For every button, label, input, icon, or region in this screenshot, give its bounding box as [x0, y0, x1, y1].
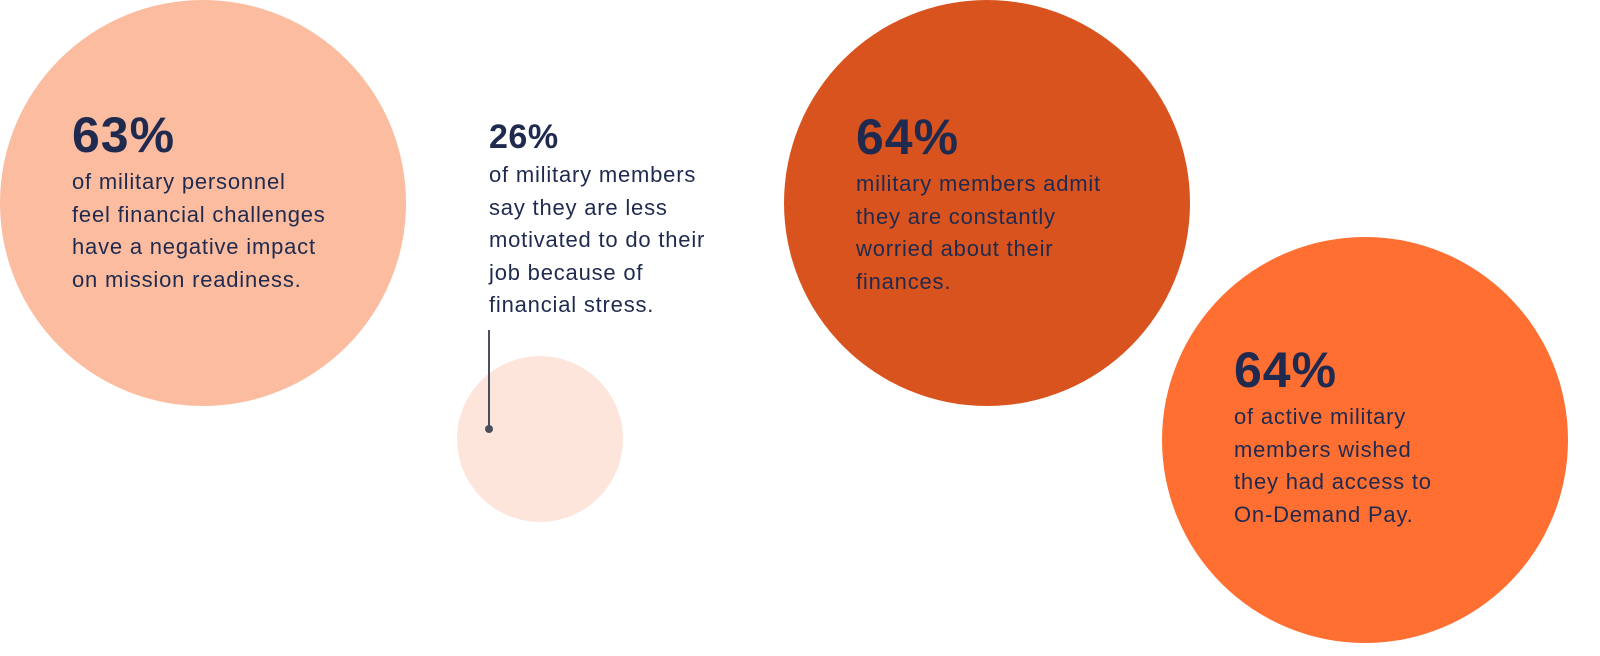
text: 26%: say they are less	[489, 194, 668, 220]
text: 64% worried	[856, 109, 1101, 294]
circle: 64% orange	[1162, 237, 1568, 643]
text: 64% on-demand: On-Demand Pay.	[1234, 502, 1414, 526]
text: 64% worried: 64%	[856, 109, 959, 165]
text: 63%: of military personnel	[72, 169, 286, 194]
text: 64% on-demand: of active military	[1234, 404, 1406, 429]
text: 63%: 63%	[72, 107, 175, 163]
circle: small 26%	[457, 356, 623, 522]
circle: 63%	[0, 0, 406, 406]
text: 64% worried: they are constantly	[856, 204, 1056, 228]
text: 26%: motivated to do their	[489, 227, 705, 252]
text: 64% worried: worried about their	[856, 236, 1053, 261]
text: 63%: on mission readiness.	[72, 266, 302, 292]
text: 64% on-demand	[1234, 342, 1432, 526]
text: 26%: job because of	[489, 260, 643, 284]
text: 63%	[72, 107, 326, 292]
text: 64% on-demand: they had access to	[1234, 469, 1432, 494]
text: 64% on-demand: members wished	[1234, 436, 1411, 462]
text: 63%: feel financial challenges	[72, 202, 326, 226]
text: 64% on-demand: 64%	[1234, 342, 1337, 398]
circle: 64% dark	[784, 0, 1190, 406]
text: 26%: of military members	[489, 162, 696, 187]
connector dot	[485, 425, 493, 433]
text: 63%: have a negative impact	[72, 234, 316, 259]
text: 64% worried: military members admit	[856, 171, 1101, 196]
text: 26%	[488, 118, 705, 317]
text: 64% worried: finances.	[856, 268, 951, 294]
connector line	[488, 330, 490, 429]
text: 26%: financial stress.	[489, 292, 654, 317]
text: 26%: 26%	[489, 118, 559, 156]
